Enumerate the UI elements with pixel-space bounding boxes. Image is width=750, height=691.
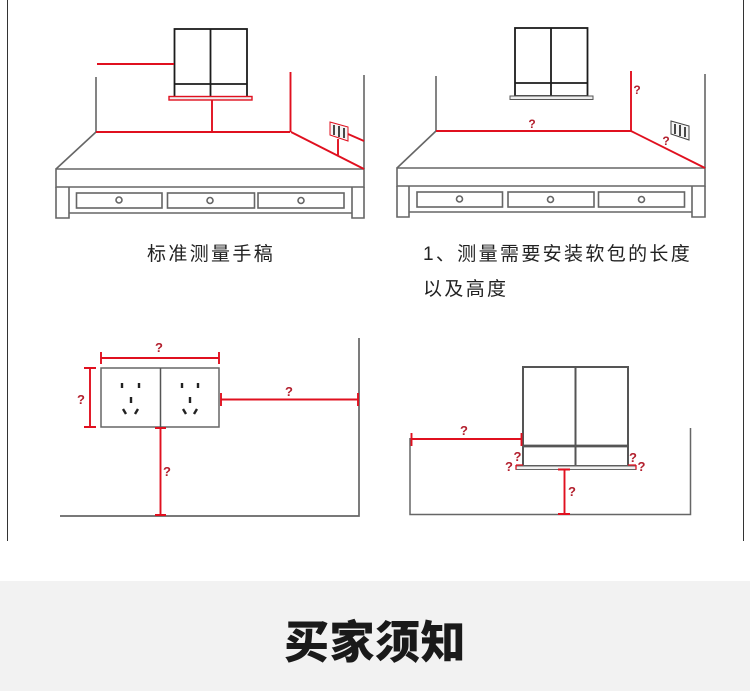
question marks: ? (505, 459, 513, 474)
room walls and floor (56, 75, 364, 169)
panel: socket measurement (60, 338, 359, 516)
bed with drawers (56, 169, 364, 218)
question marks: ? (568, 484, 576, 499)
icon: wall socket (671, 121, 689, 140)
room walls and floor (397, 74, 705, 168)
caption: standard sketch: 标准测量手稿 (147, 244, 275, 265)
red dimension lines (84, 352, 358, 515)
icon: window front view (523, 367, 628, 466)
window sill (510, 96, 593, 100)
window sill (516, 466, 636, 470)
window sill with red outline (169, 96, 252, 100)
bed with drawers (397, 168, 705, 217)
caption: measure length and height: 以及高度 (423, 279, 508, 300)
red measurement lines (436, 71, 705, 168)
title: buyer notice: 买家须知 (284, 617, 466, 668)
question marks: ? (460, 423, 468, 438)
outer frame left line (6, 0, 8, 541)
question marks: ? (285, 384, 293, 399)
footer band (0, 581, 750, 691)
red dimension lines (411, 433, 636, 514)
panel: measure length and height (397, 28, 705, 217)
question marks (77, 340, 293, 479)
question marks: ? (638, 459, 646, 474)
question marks: ? (528, 117, 536, 131)
caption: measure length and height: 1、测量需要安装软包的长度 (423, 244, 692, 265)
outer frame right line (742, 0, 744, 541)
panel: standard measurement sketch (56, 29, 364, 218)
wall and floor (60, 338, 359, 516)
question marks: ? (77, 392, 85, 407)
caption: measure length and height (423, 244, 692, 300)
question marks: ? (163, 464, 171, 479)
room walls and floor (410, 428, 690, 514)
question marks: ? (514, 449, 522, 464)
icon: window (174, 29, 247, 97)
red measurement lines (96, 64, 364, 169)
question marks (460, 423, 646, 499)
icon: wall socket (330, 122, 348, 141)
question marks: ? (155, 340, 163, 355)
question marks: ? (633, 83, 641, 97)
question marks (528, 83, 670, 148)
question marks: ? (662, 134, 670, 148)
icon: double socket (101, 368, 219, 427)
question marks: ? (629, 450, 637, 465)
icon: window (515, 28, 588, 96)
panel: window measurement (410, 367, 690, 514)
